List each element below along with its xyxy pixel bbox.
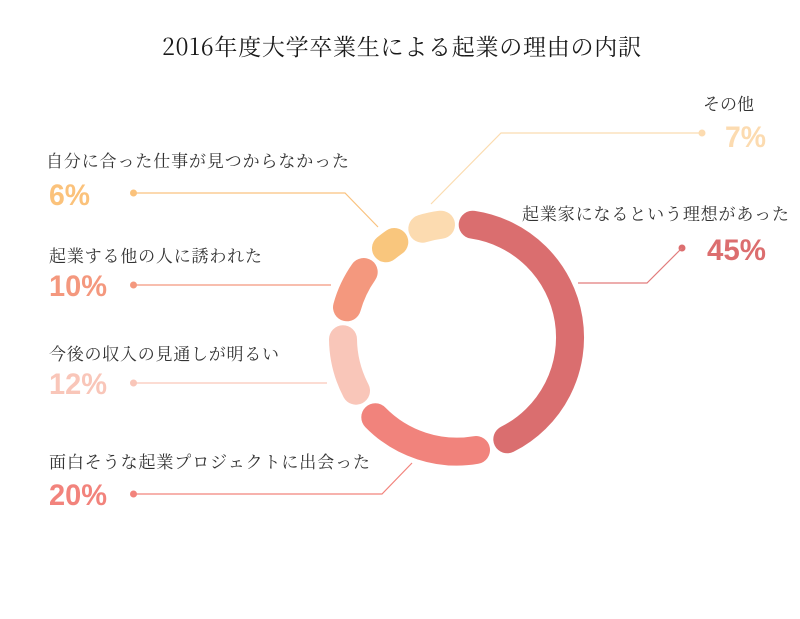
segment: 6% — [386, 242, 394, 248]
title: 2016年度大学卒業生による起業の理由の内訳 — [162, 29, 641, 62]
donut chart — [343, 225, 570, 452]
callout: 今後の収入の見通しが明るい 12%: 12% — [49, 368, 107, 401]
callout: 今後の収入の見通しが明るい 12%: 今後の収入の見通しが明るい — [49, 340, 279, 365]
callout: その他 7%: 7% — [725, 121, 766, 154]
segment: 45% — [473, 225, 570, 439]
segment: 12% — [343, 339, 356, 391]
callout: 起業家になるという理想があった 45% — [522, 200, 789, 283]
callout: 起業する他の人に誘われた 10%: 起業する他の人に誘われた — [49, 242, 262, 267]
callout: 起業する他の人に誘われた 10%: 10% — [49, 270, 107, 303]
callout: 自分に合った仕事が見つからなかった 6%: 自分に合った仕事が見つからなかった — [46, 147, 349, 172]
callout: 面白そうな起業プロジェクトに出会った 20%: 20% — [49, 479, 107, 512]
callout: その他 7% — [431, 90, 766, 204]
callout: 起業する他の人に誘われた 10% — [49, 242, 331, 303]
segment: 7% — [422, 225, 441, 229]
callout: 面白そうな起業プロジェクトに出会った 20%: 面白そうな起業プロジェクトに出会った — [49, 448, 370, 473]
callout: 自分に合った仕事が見つからなかった 6%: 6% — [49, 179, 90, 212]
callout: その他 7%: その他 — [703, 90, 754, 115]
callout: 今後の収入の見通しが明るい 12% — [49, 340, 327, 401]
callout: 面白そうな起業プロジェクトに出会った 20% — [49, 448, 412, 512]
segment: 20% — [375, 417, 476, 452]
callout: 起業家になるという理想があった 45%: 45% — [707, 234, 766, 267]
segment: 10% — [347, 272, 364, 307]
callout: 自分に合った仕事が見つからなかった 6% — [46, 147, 378, 227]
callout: 起業家になるという理想があった 45%: 起業家になるという理想があった — [522, 200, 789, 225]
